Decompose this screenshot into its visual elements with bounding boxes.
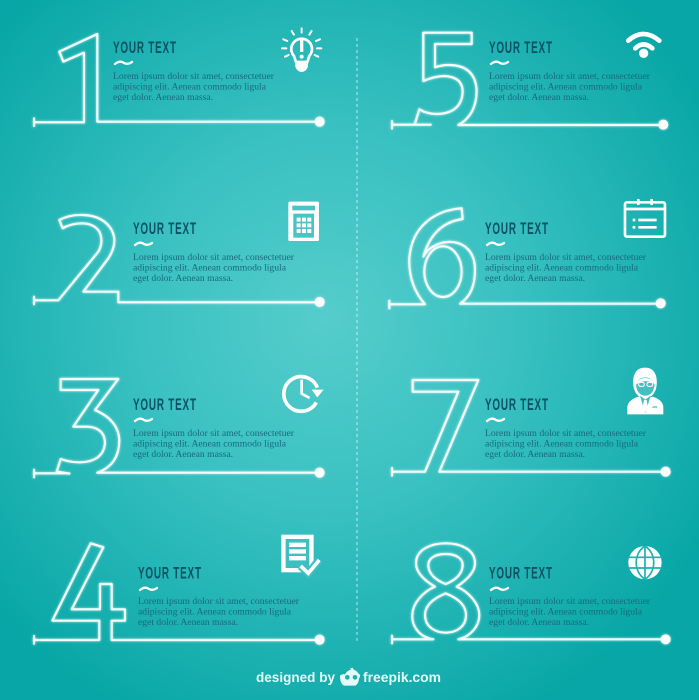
body text: adipiscing elit. Aenean commodo ligula (138, 608, 292, 618)
tilde (491, 62, 508, 64)
icon: clock (284, 377, 324, 411)
panel: step 1 (34, 28, 325, 127)
heading: YOUR TEXT (489, 564, 553, 582)
tilde (487, 419, 504, 421)
body text: Lorem ipsum dolor sit amet, consectetuer (489, 597, 651, 607)
body text: eget dolor. Aenean massa. (489, 618, 589, 628)
panel: step 2 (34, 202, 325, 307)
body text: eget dolor. Aenean massa. (133, 274, 233, 284)
number 4 (34, 543, 325, 645)
number 3 (34, 379, 325, 478)
footer credit (256, 668, 441, 686)
icon: globe (628, 546, 662, 579)
number 1 (34, 34, 325, 127)
icon: calendar (625, 199, 665, 237)
icon: wifi (628, 34, 659, 58)
icon: light bulb (282, 28, 321, 72)
body text: eget dolor. Aenean massa. (489, 93, 589, 103)
tilde (135, 419, 152, 421)
body text: Lorem ipsum dolor sit amet, consectetuer (133, 253, 295, 263)
body text: adipiscing elit. Aenean commodo ligula (485, 264, 639, 274)
freepik.com text: freepik.com (363, 670, 441, 685)
heading: YOUR TEXT (113, 38, 177, 57)
icon: freepik logo (340, 668, 360, 686)
body text: adipiscing elit. Aenean commodo ligula (133, 440, 287, 450)
panel: step 8 (392, 543, 671, 644)
body text: eget dolor. Aenean massa. (133, 450, 233, 460)
panel: step 5 (392, 33, 668, 130)
number 5 (392, 33, 668, 130)
panel: step 6 (389, 199, 666, 308)
tilde (135, 243, 152, 245)
body text: Lorem ipsum dolor sit amet, consectetuer (485, 253, 647, 263)
icon: document with check (281, 535, 319, 573)
body text: adipiscing elit. Aenean commodo ligula (133, 264, 287, 274)
body text: Lorem ipsum dolor sit amet, consectetuer (113, 72, 275, 82)
body text: adipiscing elit. Aenean commodo ligula (485, 440, 639, 450)
body text: eget dolor. Aenean massa. (485, 450, 585, 460)
heading: YOUR TEXT (133, 219, 197, 238)
number 7 (392, 380, 671, 477)
tilde (487, 243, 504, 245)
body text: eget dolor. Aenean massa. (113, 93, 213, 103)
body text: eget dolor. Aenean massa. (138, 618, 238, 628)
icon: person with glasses (627, 368, 663, 414)
heading: YOUR TEXT (485, 219, 549, 238)
body text: Lorem ipsum dolor sit amet, consectetuer (485, 429, 647, 439)
body text: adipiscing elit. Aenean commodo ligula (489, 82, 643, 92)
body text: Lorem ipsum dolor sit amet, consectetuer (138, 597, 300, 607)
tilde (115, 62, 132, 64)
number 2 (34, 215, 325, 307)
body text: adipiscing elit. Aenean commodo ligula (489, 608, 643, 618)
designed by text: designed by (256, 670, 335, 685)
body text: Lorem ipsum dolor sit amet, consectetuer (133, 429, 295, 439)
icon: calculator (288, 202, 319, 241)
number 8 (392, 543, 671, 644)
heading: YOUR TEXT (133, 395, 197, 414)
panel: step 4 (34, 535, 325, 645)
tilde (140, 588, 157, 590)
body text: eget dolor. Aenean massa. (485, 274, 585, 284)
heading: YOUR TEXT (489, 38, 553, 57)
panel: step 3 (34, 377, 325, 478)
body text: adipiscing elit. Aenean commodo ligula (113, 82, 267, 92)
number 6 (389, 208, 666, 308)
tilde (491, 588, 508, 590)
heading: YOUR TEXT (485, 395, 549, 414)
panel: step 7 (392, 368, 671, 477)
body text: Lorem ipsum dolor sit amet, consectetuer (489, 72, 651, 82)
heading: YOUR TEXT (138, 564, 202, 582)
